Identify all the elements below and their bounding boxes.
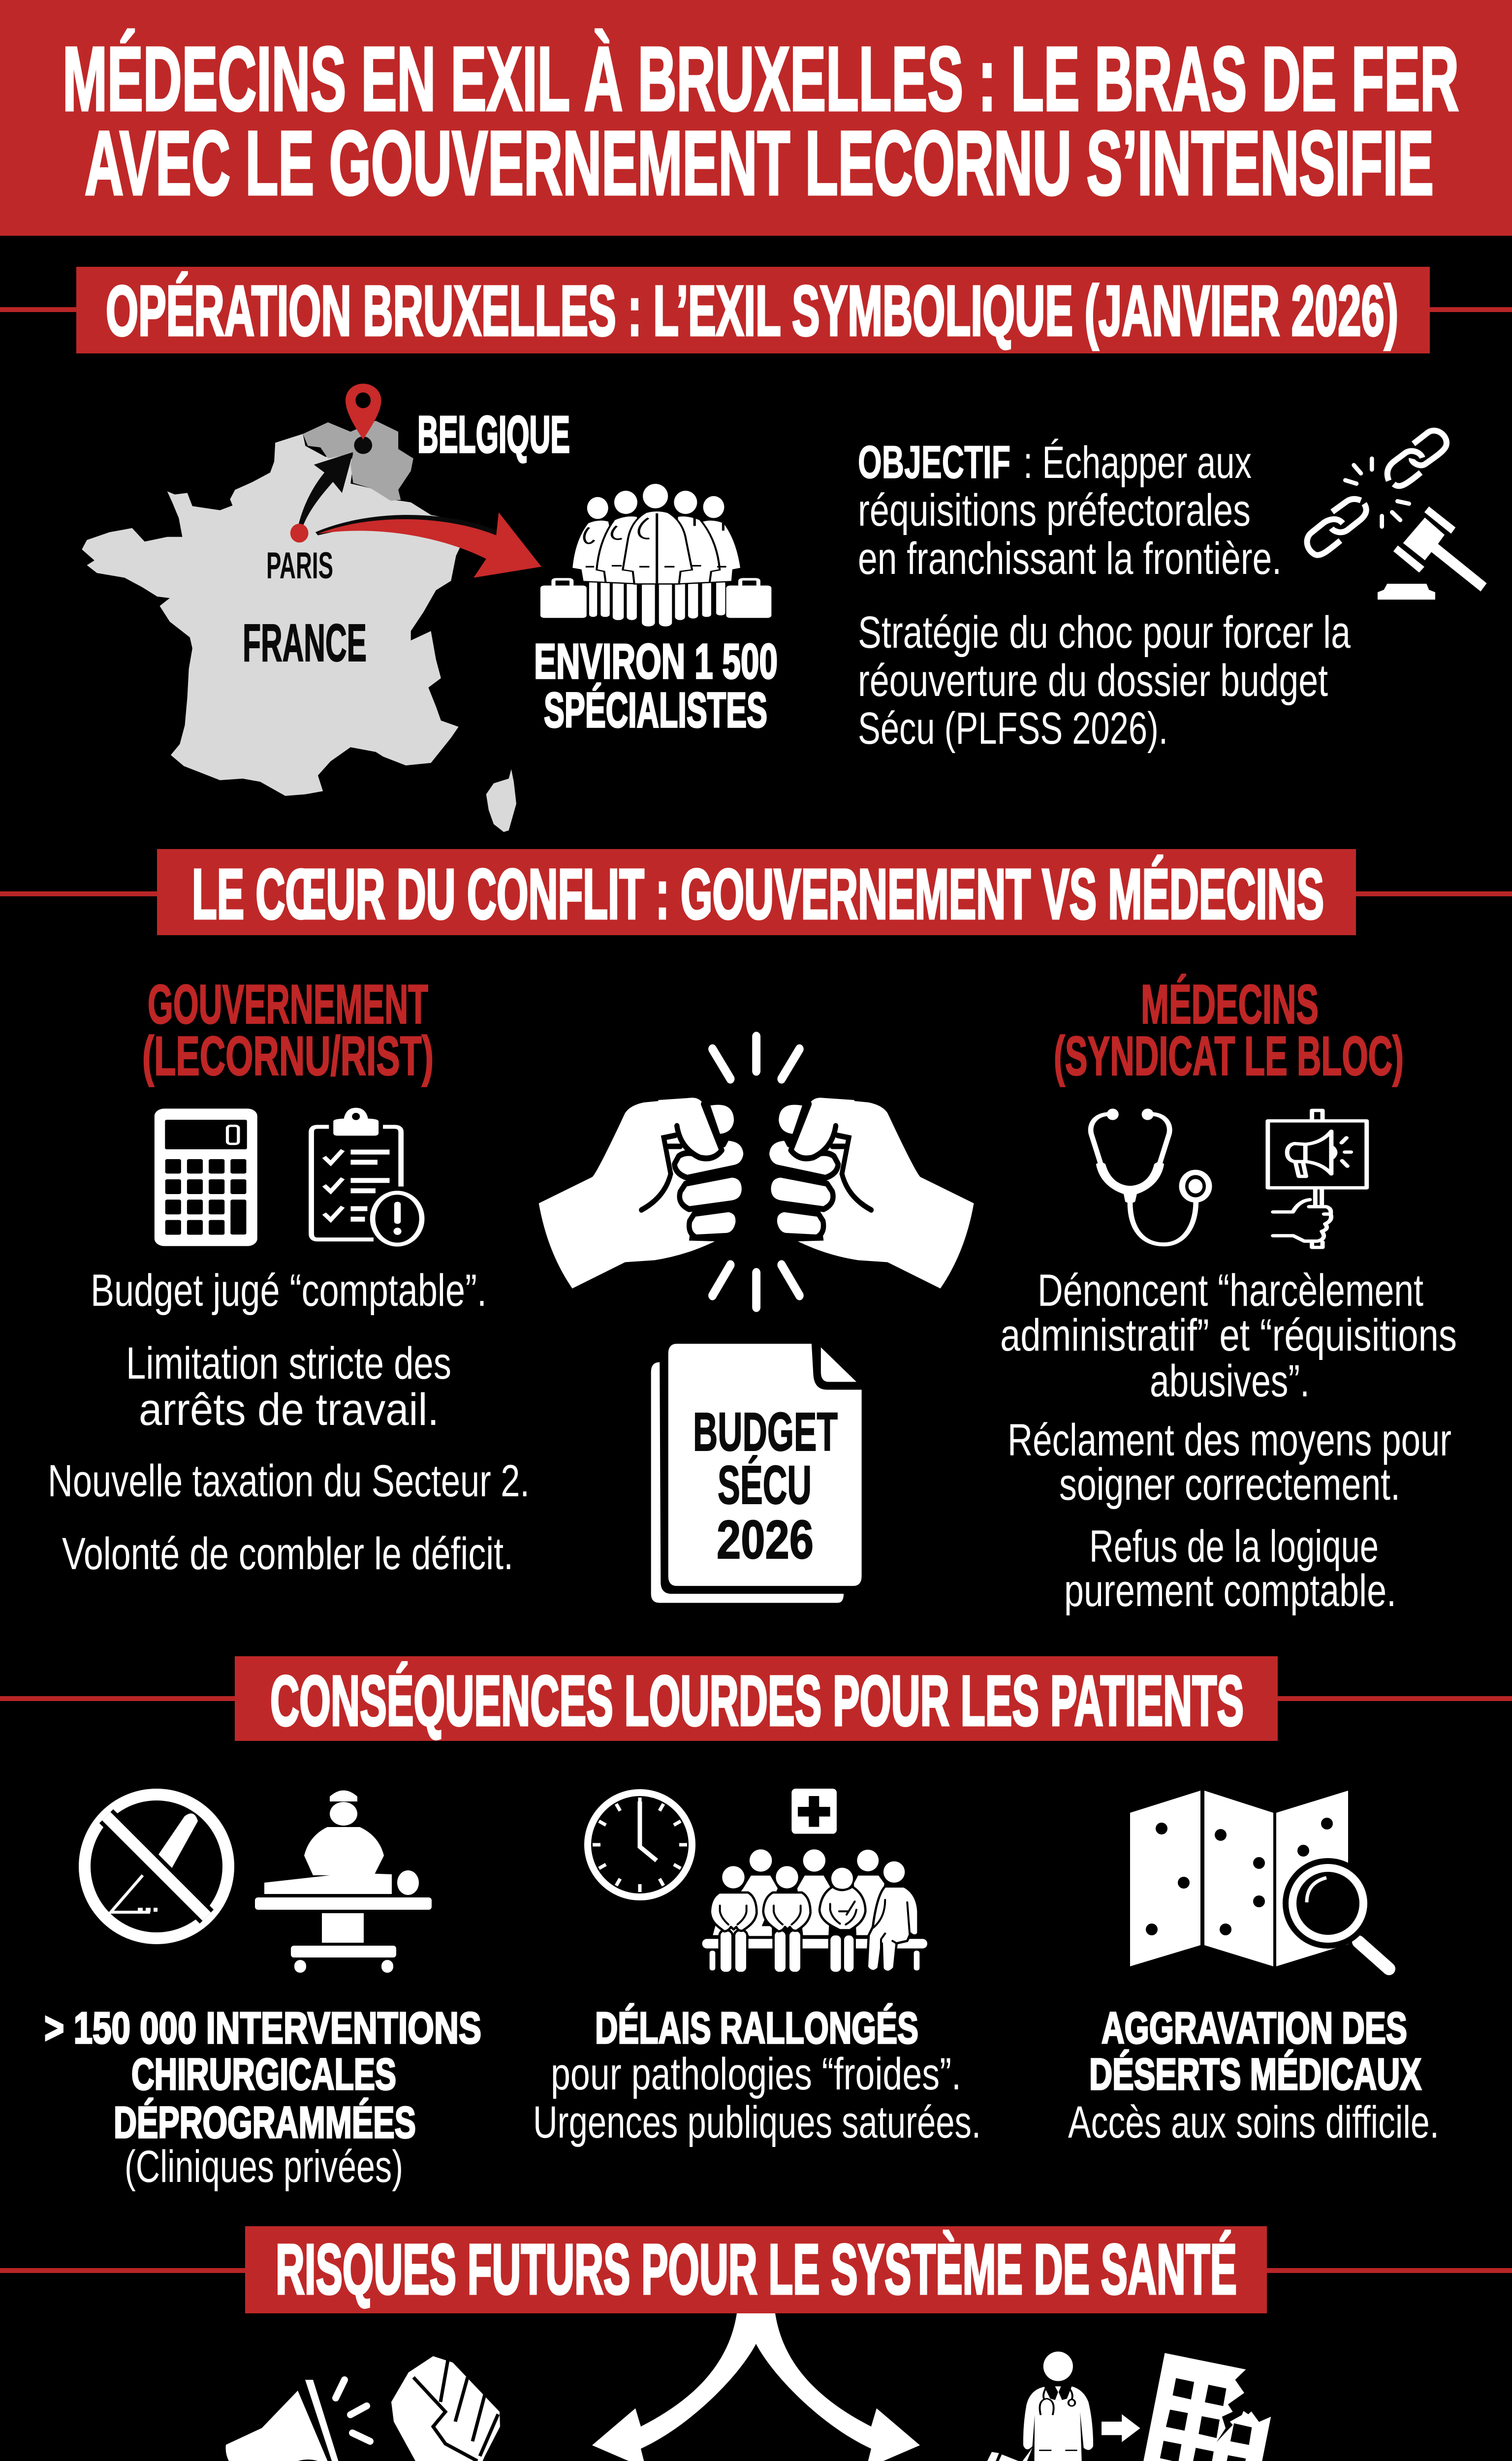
text block: médecins arguments: purement comptable. [1064,1566,1396,1616]
text block: médecins arguments [1000,1265,1457,1616]
text block: médecins arguments: soigner correctement. [1059,1459,1400,1510]
icon: waiting patients [702,1849,927,1973]
icon: stethoscope [1091,1108,1212,1244]
panel: fuite des praticiens [773,2352,1469,2461]
icon: protest sign with megaphone [1268,1110,1367,1247]
icon: raised fist [391,2356,500,2461]
text: interventions déprogrammées: (Cliniques privées) [125,2142,403,2192]
panel: interventions déprogrammées [44,1791,481,2192]
panel: mobilisation [192,2356,544,2461]
text block: gouvernement arguments: Limitation stricte des [126,1338,451,1388]
text block: gouvernement arguments: Volonté de combler le déficit. [62,1529,513,1579]
icon: budget document: SÉCU [718,1455,812,1515]
panel: déserts médicaux [1068,1791,1439,2147]
panel: délais rallongés [533,1789,981,2147]
text: interventions déprogrammées: DÉPROGRAMMÉES [114,2098,416,2147]
text: déserts médicaux [1068,2004,1439,2147]
text block: médecins arguments: abusives”. [1150,1356,1310,1406]
map of France and Belgium with arrows: BELGIQUE [417,406,570,464]
icon: budget document: BUDGET [693,1402,838,1462]
icon: folded map with magnifier [1130,1791,1389,1969]
icon: surgeon and operating table [255,1791,432,1973]
icon: megaphone [226,2380,370,2461]
panel: médecins [1000,974,1457,1616]
text block: gouvernement arguments [48,1265,530,1579]
callout: environ 1 500 spécialistes [534,634,778,738]
text block: objectif [858,436,1351,754]
panel: gouvernement [48,974,530,1579]
text: délais rallongés: Urgences publiques saturées. [533,2097,981,2147]
text: délais rallongés [533,2003,981,2147]
text block: objectif: en franchissant la frontière. [858,534,1282,584]
text: interventions déprogrammées: CHIRURGICALES [131,2050,396,2099]
heading: médecins: MÉDECINS [1141,974,1319,1035]
text block: objectif: réquisitions préfectorales [858,485,1251,536]
icon: clock [588,1793,692,1897]
icon: medical cross [791,1789,837,1834]
heading: gouvernement: GOUVERNEMENT [148,974,428,1035]
text: délais rallongés: DÉLAIS RALLONGÉS [595,2003,918,2053]
heading: médecins [1054,974,1404,1087]
map of France and Belgium with arrows: PARIS [266,545,333,587]
text block: médecins arguments: Refus de la logique [1089,1521,1379,1572]
callout: environ 1 500 spécialistes: SPÉCIALISTES [544,683,767,738]
heading: gouvernement [142,974,434,1087]
icon: checklist with warning [312,1108,422,1245]
icon: budget document [651,1344,862,1603]
title banner [0,0,1512,236]
text block: objectif: OBJECTIF [858,436,1010,488]
text block: objectif: Stratégie du choc pour forcer la [858,607,1351,658]
icon: clashing fists [539,1037,974,1307]
icon: crumbling hospital [1122,2353,1271,2461]
map of France and Belgium with arrows: FRANCE [243,613,367,672]
text block: gouvernement arguments: arrêts de travail. [139,1385,439,1435]
text block: objectif: Sécu (PLFSS 2026). [858,703,1168,754]
map of France and Belgium with arrows [82,384,570,832]
text block: gouvernement arguments: Nouvelle taxation du Secteur 2. [48,1456,530,1506]
icon: budget document: 2026 [717,1510,814,1570]
icon: doctor with suitcase [972,2352,1093,2461]
heading: gouvernement: (LECORNU/RIST) [142,1025,434,1087]
text: délais rallongés: pour pathologies “froides”. [551,2049,961,2099]
icon: group of doctors with suitcases [540,484,771,627]
text: interventions déprogrammées: > 150 000 INTERVENTIONS [44,2004,481,2053]
text block: objectif: réouverture du dossier budget [858,656,1328,706]
text block: gouvernement arguments: Budget jugé “comptable”. [91,1265,487,1316]
text block: objectif: : Échapper aux [1023,438,1252,488]
callout: environ 1 500 spécialistes: ENVIRON 1 500 [534,634,778,689]
icon: calculator [155,1108,257,1246]
text: interventions déprogrammées [44,2004,481,2192]
icon: crossed-out scalpel [85,1795,228,1938]
icon: broken chain and gavel [1307,431,1487,599]
arrow: branching paths [592,2313,920,2461]
arrow: to hospital [1102,2414,1140,2442]
